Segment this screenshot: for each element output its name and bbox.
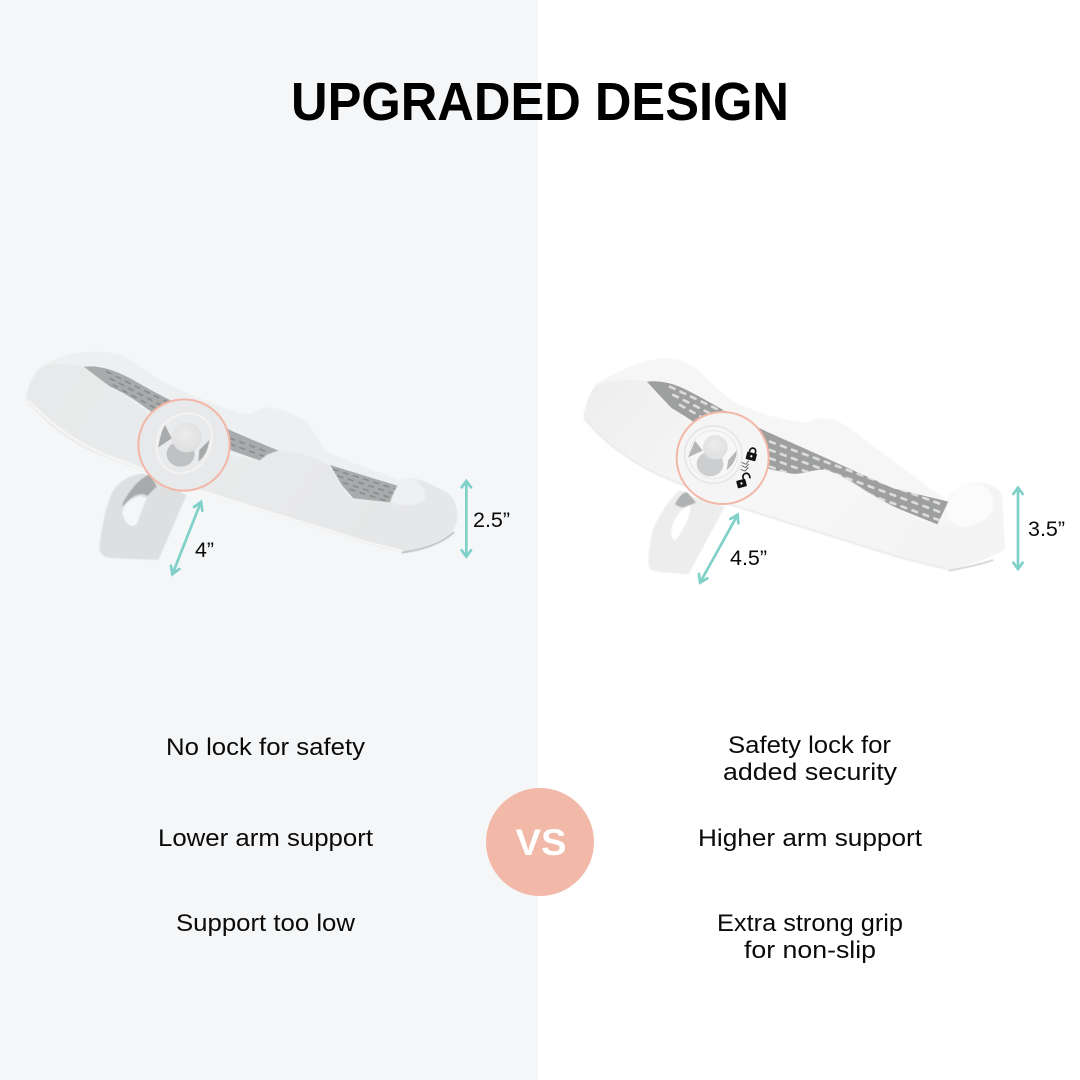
- right feature: strong grip: [717, 910, 903, 964]
- icon: closed padlock: [745, 447, 758, 461]
- left feature list: [158, 734, 373, 937]
- VS badge: [486, 788, 594, 896]
- right feature: higher arm support: Higher arm support: [698, 825, 922, 852]
- right product: upgraded bath support: [583, 358, 1023, 583]
- label: 4.5 inch: 4.5”: [730, 547, 767, 570]
- label: 4 inch: 4”: [195, 539, 214, 562]
- right feature: strong grip: for non-slip: [744, 937, 876, 964]
- right feature: strong grip: Extra strong grip: [717, 910, 903, 937]
- right arm height arrow: [1013, 488, 1023, 569]
- right stand length arrow: [699, 515, 738, 583]
- icon: chevrons between locks: [741, 461, 749, 471]
- left stand length arrow: [171, 502, 202, 574]
- right product rim: [583, 358, 1005, 570]
- label: 3.5 inch: 3.5”: [1028, 518, 1065, 541]
- right feature: safety lock: added security: [723, 759, 897, 786]
- right feature list: [698, 732, 922, 964]
- right lock detail circle: [677, 412, 769, 504]
- left panel background: [0, 0, 538, 1080]
- left product mesh: [84, 366, 398, 502]
- icon: open padlock: [735, 473, 752, 488]
- right product stand: [649, 490, 725, 574]
- left feature: no lock: No lock for safety: [166, 734, 365, 761]
- right feature: safety lock: [723, 732, 897, 786]
- left feature: support too low: Support too low: [176, 910, 356, 937]
- left lock detail circle: [138, 399, 230, 491]
- left product front wall: [26, 364, 457, 553]
- left product: old bath support: [26, 352, 471, 574]
- title: UPGRADED DESIGN: [291, 72, 789, 132]
- left product stand: [99, 473, 187, 560]
- label: 2.5 inch: 2.5”: [473, 509, 510, 532]
- right product mesh: [646, 381, 948, 524]
- left arm height arrow: [462, 481, 471, 557]
- left product rim: [26, 352, 457, 552]
- left feature: lower arm support: Lower arm support: [158, 825, 373, 852]
- VS badge: VS: [516, 822, 566, 863]
- right product front wall: [583, 380, 1005, 571]
- right feature: safety lock: Safety lock for: [728, 732, 891, 759]
